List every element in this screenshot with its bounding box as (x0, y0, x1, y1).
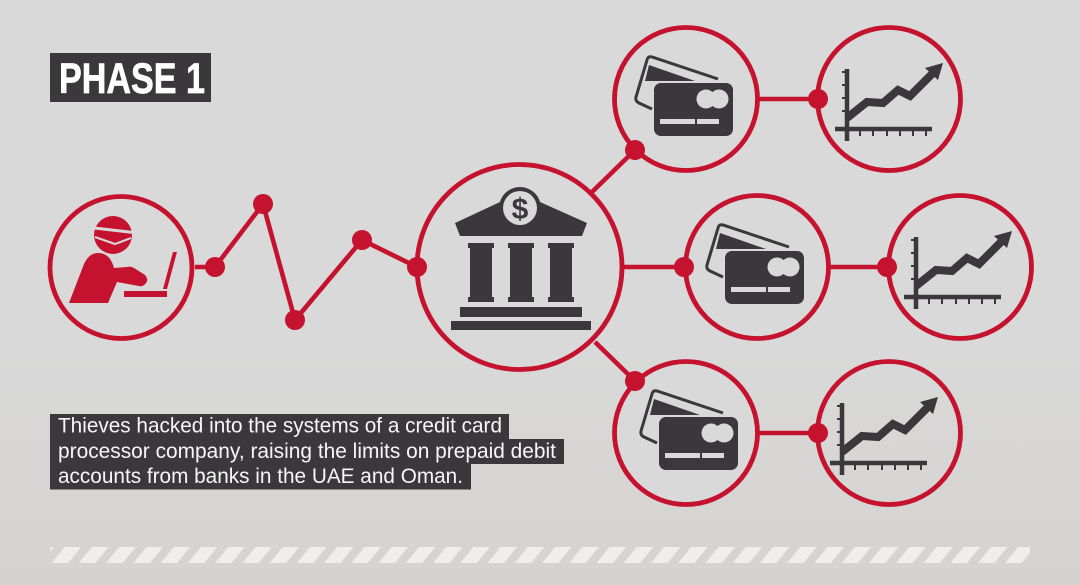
card circle: middle (686, 196, 828, 338)
icon: bank: $ (512, 193, 529, 226)
chart circle: top (818, 28, 960, 170)
connector: hacker to bank (195, 194, 427, 330)
striped divider (50, 547, 1030, 563)
icon: hacker at laptop (50, 196, 192, 338)
text block: description: processor company, raising the limits on prepaid debit (58, 439, 556, 463)
chart circle: middle (888, 196, 1032, 338)
card circle: bottom (614, 362, 758, 504)
card circle: top (614, 28, 758, 170)
text block: description: accounts from banks in the UAE and Oman. (58, 464, 463, 488)
icon: bank (417, 164, 622, 370)
text block: description (50, 414, 564, 490)
connector nodes (625, 89, 897, 443)
chart circle: bottom (818, 362, 960, 504)
text block: description: Thieves hacked into the systems of a credit card (58, 414, 502, 438)
connectors: bank to card accounts (592, 99, 887, 433)
title: phase 1: PHASE 1 (59, 55, 205, 103)
